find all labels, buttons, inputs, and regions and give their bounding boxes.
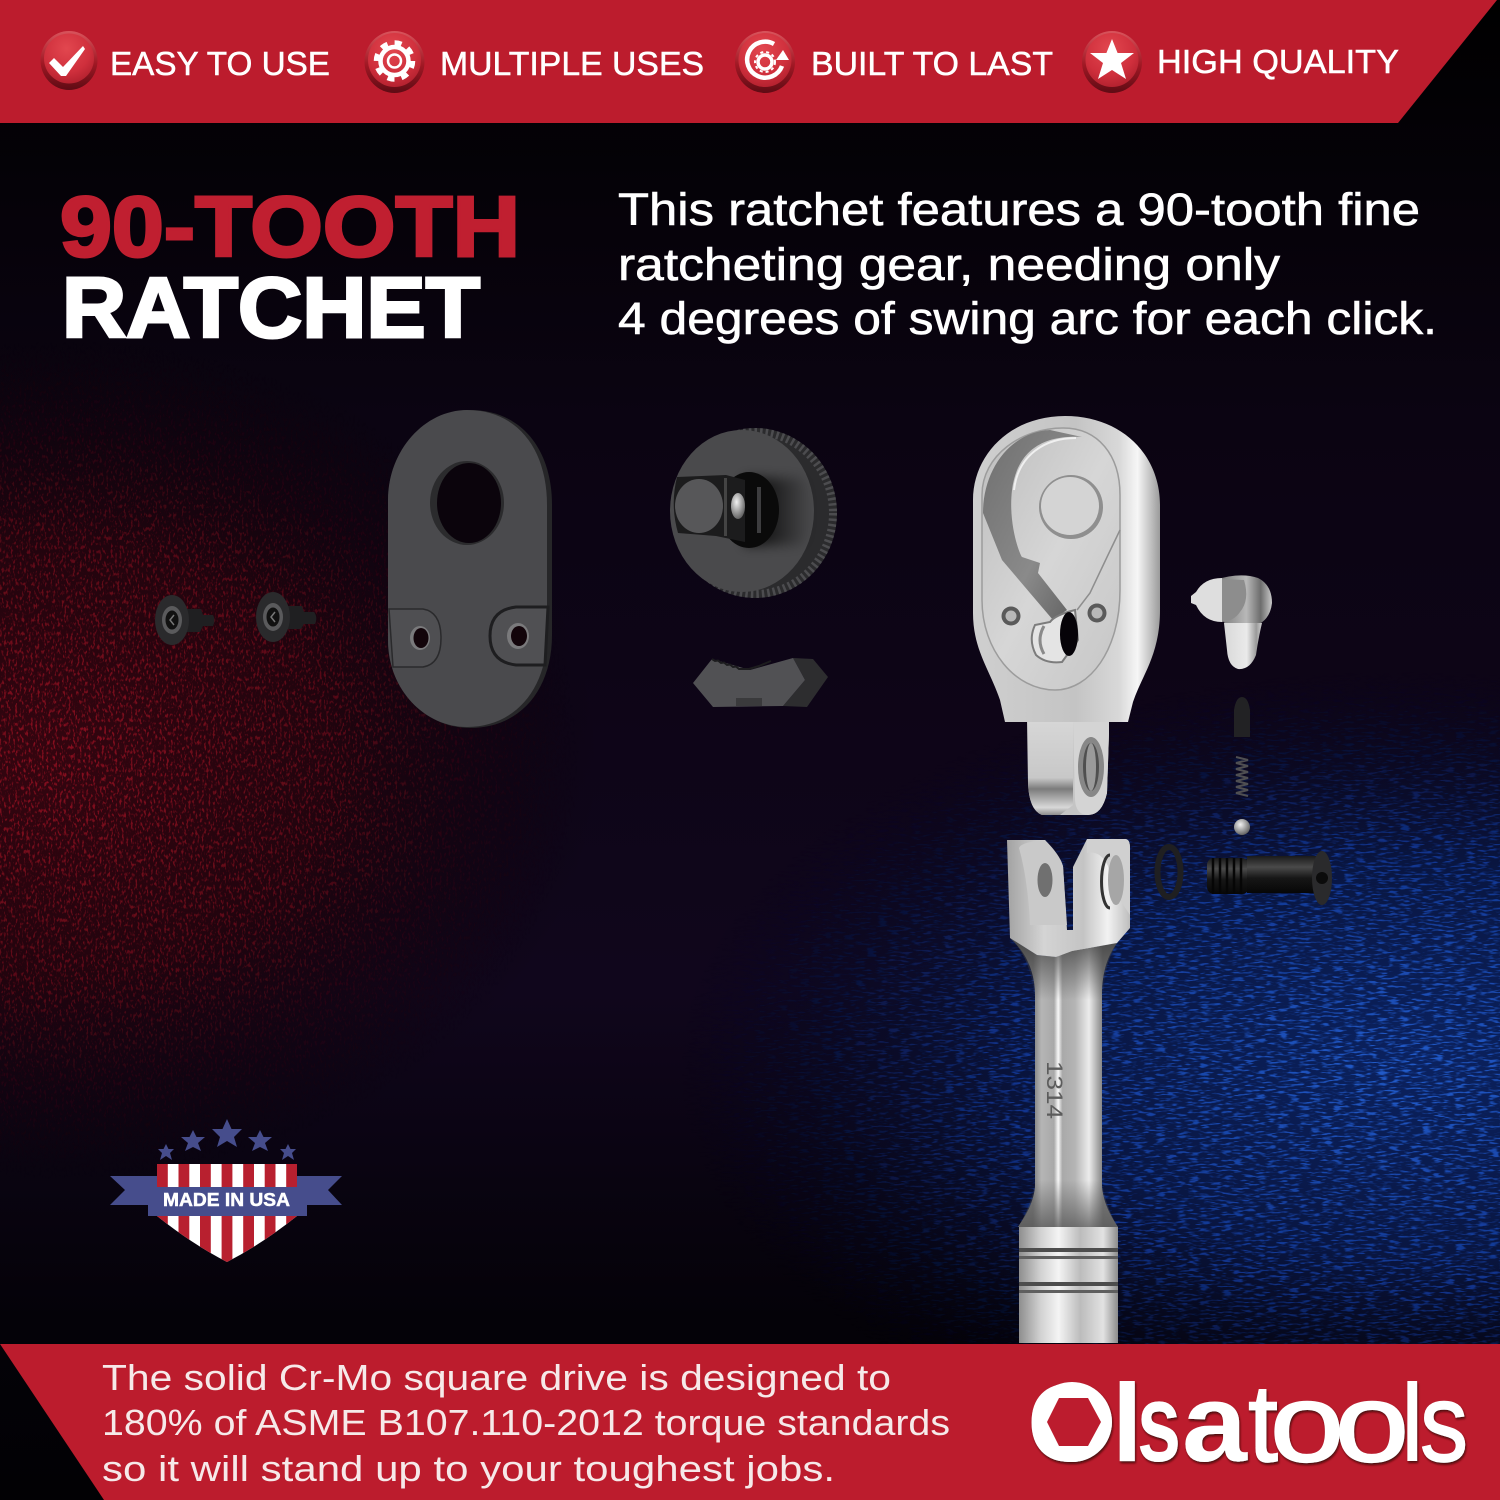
heading: 90-TOOTH — [60, 180, 520, 275]
logo: s — [1420, 1362, 1468, 1485]
steel ball — [1234, 819, 1250, 835]
icon: rotating gear button — [735, 31, 795, 93]
logo: a — [1182, 1362, 1248, 1485]
ratchet handle — [1007, 839, 1130, 1343]
made in usa badge: MADE IN USA — [163, 1190, 290, 1210]
bottom description text: The solid Cr-Mo square drive is designed to — [102, 1357, 891, 1398]
logo: o — [1335, 1362, 1409, 1485]
bottom description text: 180% of ASME B107.110-2012 torque standards — [102, 1402, 950, 1443]
o-ring — [1158, 847, 1180, 897]
description text: ratcheting gear, needing only — [618, 239, 1281, 290]
top banner — [0, 0, 1497, 123]
exploded view of ratchet — [155, 410, 1332, 1343]
description text — [618, 184, 1437, 344]
bolt: right — [256, 592, 316, 642]
logo: O — [1027, 1362, 1113, 1485]
icon: check mark button — [40, 31, 98, 90]
description text: 4 degrees of swing arc for each click. — [618, 293, 1437, 344]
logo: l — [1400, 1362, 1424, 1485]
label: easy to use: EASY TO USE — [110, 45, 330, 82]
cover plate — [388, 410, 552, 728]
label: high quality: HIGH QUALITY — [1157, 43, 1399, 80]
logo — [1027, 1362, 1468, 1485]
pawl — [693, 658, 828, 707]
reversing lever — [1191, 575, 1272, 669]
made in usa badge — [110, 1119, 342, 1264]
heading: RATCHET — [62, 261, 480, 356]
logo: t — [1248, 1362, 1278, 1485]
icon: gear button — [364, 31, 424, 93]
logo: o — [1270, 1362, 1344, 1485]
logo: s — [1137, 1362, 1181, 1485]
shaft marking: 1314 — [1042, 1061, 1067, 1119]
drive gear — [670, 428, 837, 598]
label: built to last: BUILT TO LAST — [811, 45, 1053, 82]
bottom description text — [102, 1357, 950, 1489]
bolt: left — [155, 595, 214, 645]
pivot screw — [1207, 851, 1332, 905]
bottom description text: so it will stand up to your toughest jobs. — [102, 1448, 835, 1489]
detent pin — [1234, 697, 1250, 737]
heading — [60, 180, 520, 356]
ratchet head — [973, 416, 1160, 815]
description text: This ratchet features a 90-tooth fine — [618, 184, 1420, 235]
label: multiple uses: MULTIPLE USES — [440, 45, 704, 82]
icon: star button — [1082, 31, 1142, 93]
spring — [1236, 757, 1248, 796]
logo: l — [1112, 1362, 1143, 1485]
bottom banner — [0, 1344, 1500, 1500]
